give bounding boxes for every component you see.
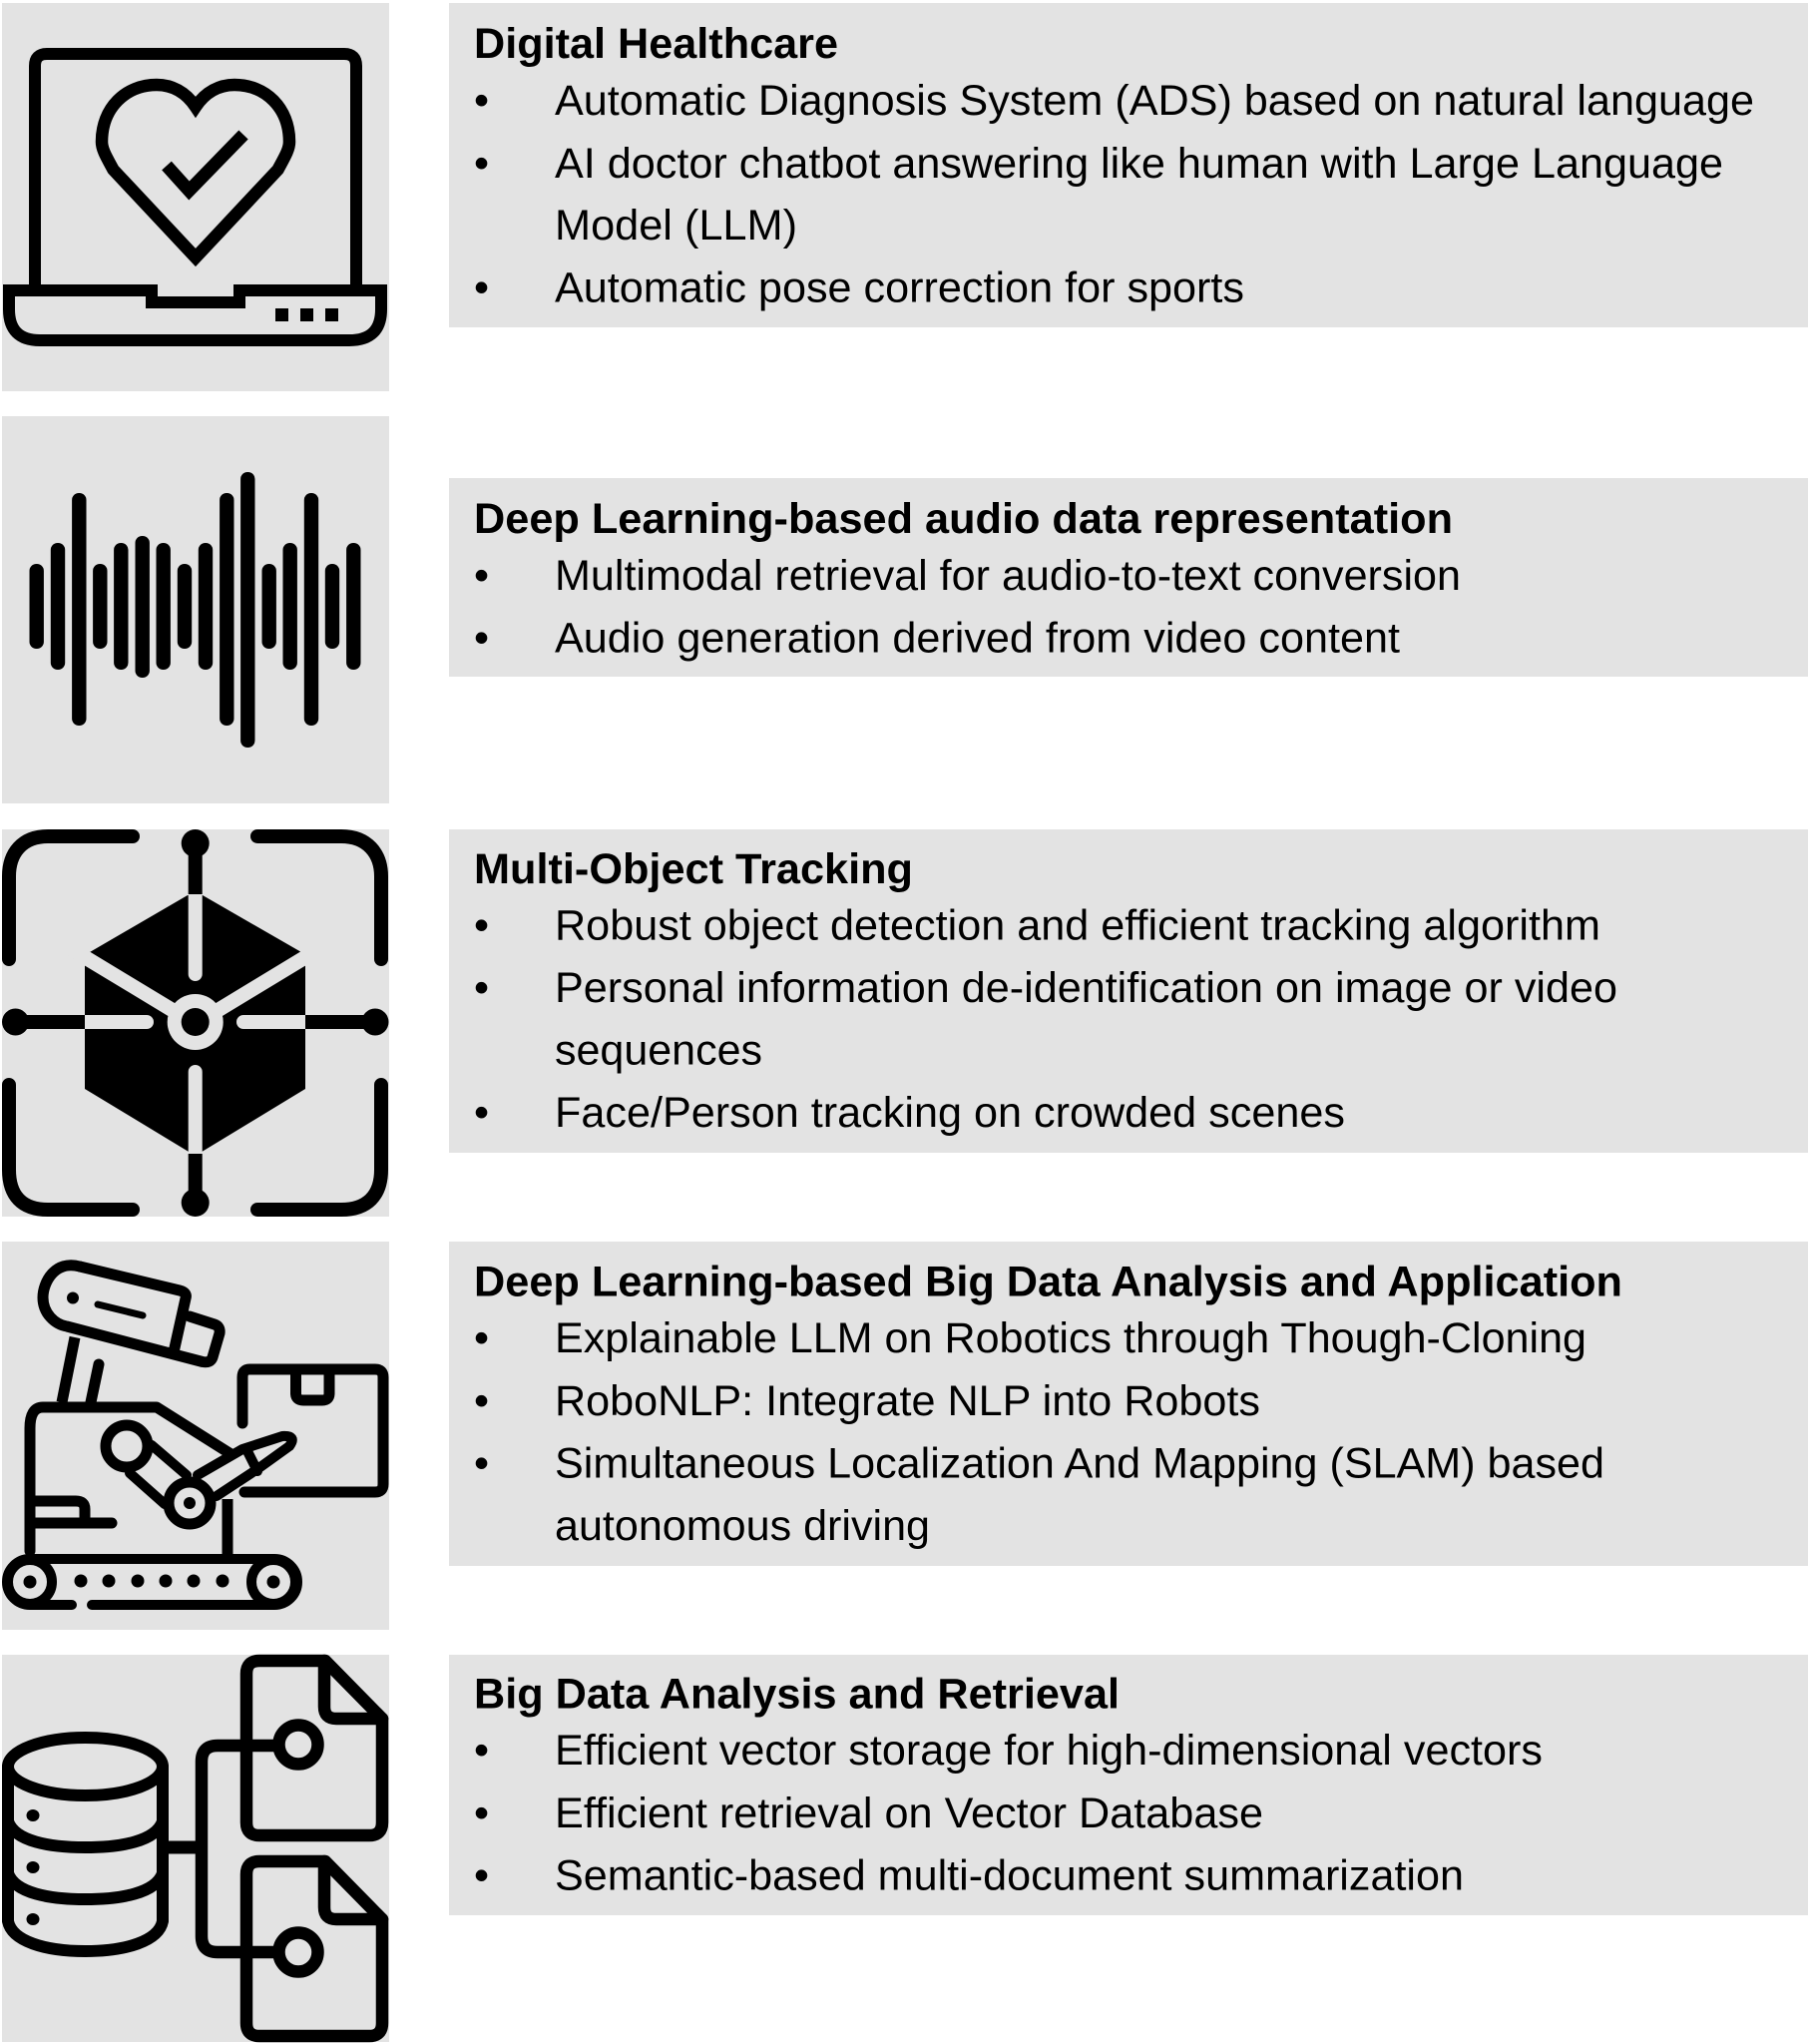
- icon panel: tracked cube: [2, 829, 389, 1217]
- heading: Deep Learning-based Big Data Analysis and Application: [474, 1258, 1622, 1305]
- bullet list: Efficient retrieval on Vector Database: [555, 1789, 1263, 1837]
- bullet list: Face/Person tracking on crowded scenes: [555, 1089, 1345, 1137]
- bullet list: Explainable LLM on Robotics through Though-Cloning: [555, 1314, 1586, 1362]
- bullet list: Efficient vector storage for high-dimensional vectors: [555, 1727, 1543, 1775]
- row: Multi-Object Tracking: [2, 829, 1808, 1217]
- bullet list: •: [474, 1089, 489, 1137]
- bullet list: Automatic Diagnosis System (ADS) based on natural language: [555, 77, 1754, 125]
- bullet list: Semantic-based multi-document summarization: [555, 1852, 1464, 1900]
- heading: Big Data Analysis and Retrieval: [474, 1671, 1120, 1719]
- heading: Deep Learning-based audio data representation: [474, 495, 1453, 543]
- bullet list: [474, 1314, 1604, 1550]
- bullet list: RoboNLP: Integrate NLP into Robots: [555, 1377, 1260, 1425]
- icon panel: laptop with heart: [2, 3, 389, 391]
- row: Big Data Analysis and Retrieval: [2, 1655, 1808, 2042]
- bullet list: •: [474, 552, 489, 600]
- text panel background: [449, 1242, 1808, 1566]
- row: Digital Healthcare: [2, 3, 1808, 391]
- heading: Multi-Object Tracking: [474, 845, 913, 893]
- text panel background: [449, 829, 1808, 1153]
- icon panel: robot arm on conveyor: [2, 1242, 389, 1630]
- bullet list: AI doctor chatbot answering like human with Large Language: [555, 140, 1723, 188]
- bullet list: •: [474, 1439, 489, 1487]
- bullet list: •: [474, 1789, 489, 1837]
- bullet list: •: [474, 77, 489, 125]
- text panel background: [449, 478, 1808, 677]
- bullet list: •: [474, 964, 489, 1012]
- bullet list: autonomous driving: [555, 1502, 930, 1550]
- bullet list: •: [474, 902, 489, 950]
- icon panel: sound waveform: [2, 416, 389, 803]
- bullet list: sequences: [555, 1026, 762, 1074]
- bullet list: Simultaneous Localization And Mapping (SLAM) based: [555, 1439, 1604, 1487]
- bullet list: [474, 552, 1461, 663]
- bullet list: [474, 77, 1754, 311]
- text panel background: [449, 1655, 1808, 1915]
- bullet list: Automatic pose correction for sports: [555, 263, 1244, 311]
- bullet list: Robust object detection and efficient tracking algorithm: [555, 902, 1600, 950]
- bullet list: •: [474, 1377, 489, 1425]
- bullet list: •: [474, 615, 489, 663]
- bullet list: •: [474, 1314, 489, 1362]
- bullet list: Audio generation derived from video content: [555, 615, 1400, 663]
- row: Big Data Analysis and Application: [2, 1242, 1808, 1630]
- bullet list: •: [474, 140, 489, 188]
- bullet list: •: [474, 1852, 489, 1900]
- heading: Digital Healthcare: [474, 20, 838, 68]
- bullet list: Model (LLM): [555, 202, 797, 250]
- bullet list: •: [474, 263, 489, 311]
- bullet list: [474, 902, 1617, 1137]
- icon panel: database linked to documents: [2, 1655, 389, 2042]
- bullet list: Multimodal retrieval for audio-to-text conversion: [555, 552, 1461, 600]
- bullet list: [474, 1727, 1543, 1900]
- row: audio data representation: [2, 416, 1808, 803]
- text panel background: [449, 3, 1808, 327]
- bullet list: Personal information de-identification on image or video: [555, 964, 1617, 1012]
- bullet list: •: [474, 1727, 489, 1775]
